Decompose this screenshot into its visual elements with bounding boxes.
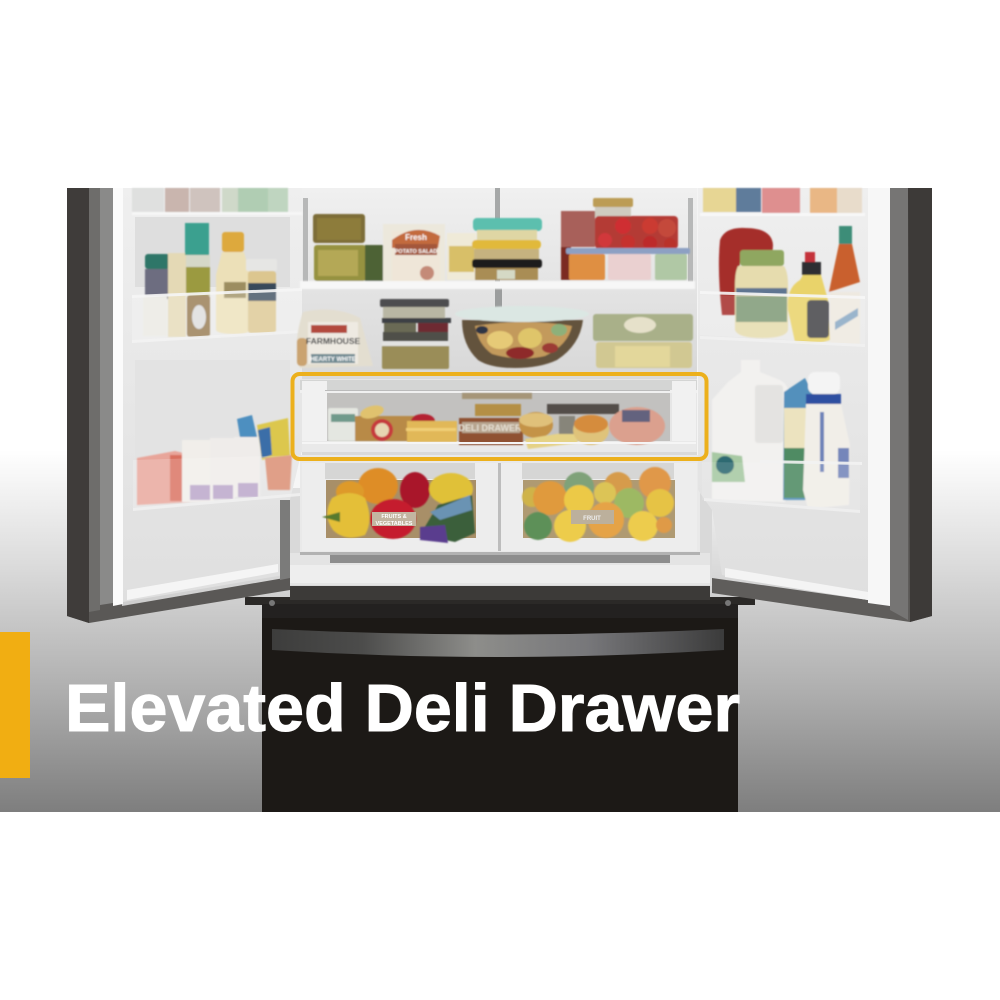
freezer drawer: [245, 585, 755, 812]
lower door bin: [702, 460, 862, 513]
background band: [0, 188, 1000, 812]
upper door bin: [132, 288, 302, 343]
deli drawer front: [302, 390, 696, 444]
condiments on upper door bin: [719, 226, 860, 344]
citrus fruit: [522, 467, 674, 542]
lower door bin: [133, 455, 300, 511]
freezer handle: [272, 629, 724, 657]
potato salad tub: POTATO SALAD: [395, 249, 437, 255]
fruit label: [571, 510, 614, 524]
highlight outline: deli drawer: [292, 374, 706, 459]
refrigerator: [67, 188, 932, 812]
top door shelf with items: [700, 188, 865, 216]
deli drawer label: DELI DRAWER: [458, 423, 522, 433]
fruit label: FRUIT: [583, 516, 601, 522]
fridge cavity: [288, 188, 712, 586]
food on lower door bin: [137, 415, 292, 505]
farmhouse bread: HEARTY WHITE: [310, 357, 356, 363]
top shelf food: [300, 198, 695, 289]
top door shelf with items: [132, 188, 302, 215]
fruits and vegetables label: VEGETABLES: [376, 521, 413, 527]
deli food: [328, 393, 665, 449]
fruits and vegetables label: FRUITS &: [381, 514, 407, 520]
right door: [698, 188, 932, 622]
fruit bowl: [455, 306, 589, 368]
fruits and vegetables label: [372, 512, 416, 527]
left door: [67, 188, 302, 623]
middle shelf food: [297, 299, 693, 369]
milk jug and cartons: [712, 360, 850, 509]
farmhouse bread: FARMHOUSE: [306, 336, 360, 346]
produce drawers: [300, 463, 700, 555]
title: Elevated Deli Drawer: [65, 671, 740, 746]
potato salad tub: Fresh: [405, 233, 427, 242]
accent bar: [0, 632, 30, 778]
vegetables: [322, 468, 475, 543]
deli drawer: [300, 379, 697, 452]
potato salad tub: [383, 224, 445, 281]
condiments on upper door bin: [143, 223, 277, 337]
upper door bin: [700, 291, 865, 347]
farmhouse bread: [297, 310, 373, 368]
